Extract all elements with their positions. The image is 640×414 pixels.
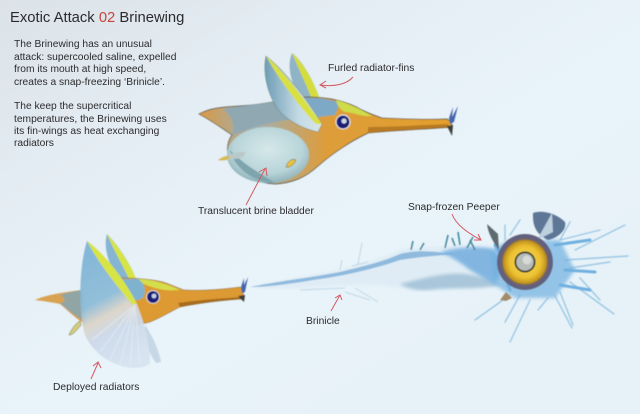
text block: radiators description: temperatures, the Brinewing uses: [14, 114, 167, 125]
pelvic spike: [69, 321, 81, 335]
mouth tip: [241, 277, 248, 293]
head and beak: [120, 278, 243, 326]
label: deployed radiators: Deployed radiators: [53, 382, 139, 393]
back fin: [106, 234, 136, 279]
illustration: brinicle ice stream: [250, 232, 505, 302]
label: furled radiator-fins: Furled radiator-fins: [328, 63, 414, 74]
text block: radiators description: The keep the supercritical: [14, 101, 131, 112]
ice spikes: [300, 243, 378, 302]
far fin: [290, 53, 319, 98]
eye: [336, 114, 350, 130]
label: translucent brine bladder: Translucent brine bladder: [198, 206, 314, 217]
text block: attack description: The Brinewing has an unusual: [14, 39, 152, 50]
label: brinicle: Brinicle: [306, 316, 340, 327]
text block: attack description: from its mouth at high speed,: [14, 64, 146, 75]
illustration: brinewing with deployed radiators: [35, 234, 248, 368]
text block: radiators description: its fin-wings as heat exchanging: [14, 126, 160, 137]
pelvic spike: [218, 152, 245, 160]
tail and body: [199, 97, 452, 184]
text block: radiators description: radiators: [14, 138, 54, 149]
beak shadow: [178, 297, 243, 307]
near fin: [265, 56, 322, 132]
yellow-green head patch: [336, 100, 372, 116]
side fin: [487, 224, 499, 250]
mouth tip: [449, 106, 458, 124]
illustration: snap-frozen peeper: [475, 212, 628, 342]
text block: attack description: creates a snap-freezing ‘Brinicle’.: [14, 77, 165, 88]
belly spot: [286, 159, 296, 167]
label: snap-frozen peeper: Snap-frozen Peeper: [408, 202, 500, 213]
bladder: [227, 127, 309, 183]
yellow-green head patch: [137, 279, 180, 290]
deployed radiator: [80, 241, 150, 368]
lower translucent fin: [145, 325, 161, 363]
back blue-gray: [223, 98, 307, 135]
eye: [146, 290, 160, 304]
dorsal fin: [533, 212, 565, 240]
title: Exotic Attack 02 Brinewing: [10, 10, 184, 26]
arrow: translucent brine bladder: [246, 168, 267, 205]
arrow: brinicle: [331, 295, 342, 311]
text block: attack description: attack: supercooled saline, expelled: [14, 52, 177, 63]
eye ring: [497, 234, 553, 290]
illustration: brinewing with furled fins: [199, 53, 458, 184]
arrow: furled radiator-fins: [320, 77, 353, 88]
ice shards: [475, 220, 628, 342]
arrow: snap-frozen peeper: [452, 214, 481, 240]
beak shadow: [368, 124, 449, 133]
arrow: deployed radiators: [91, 362, 101, 379]
tail: [35, 290, 86, 325]
